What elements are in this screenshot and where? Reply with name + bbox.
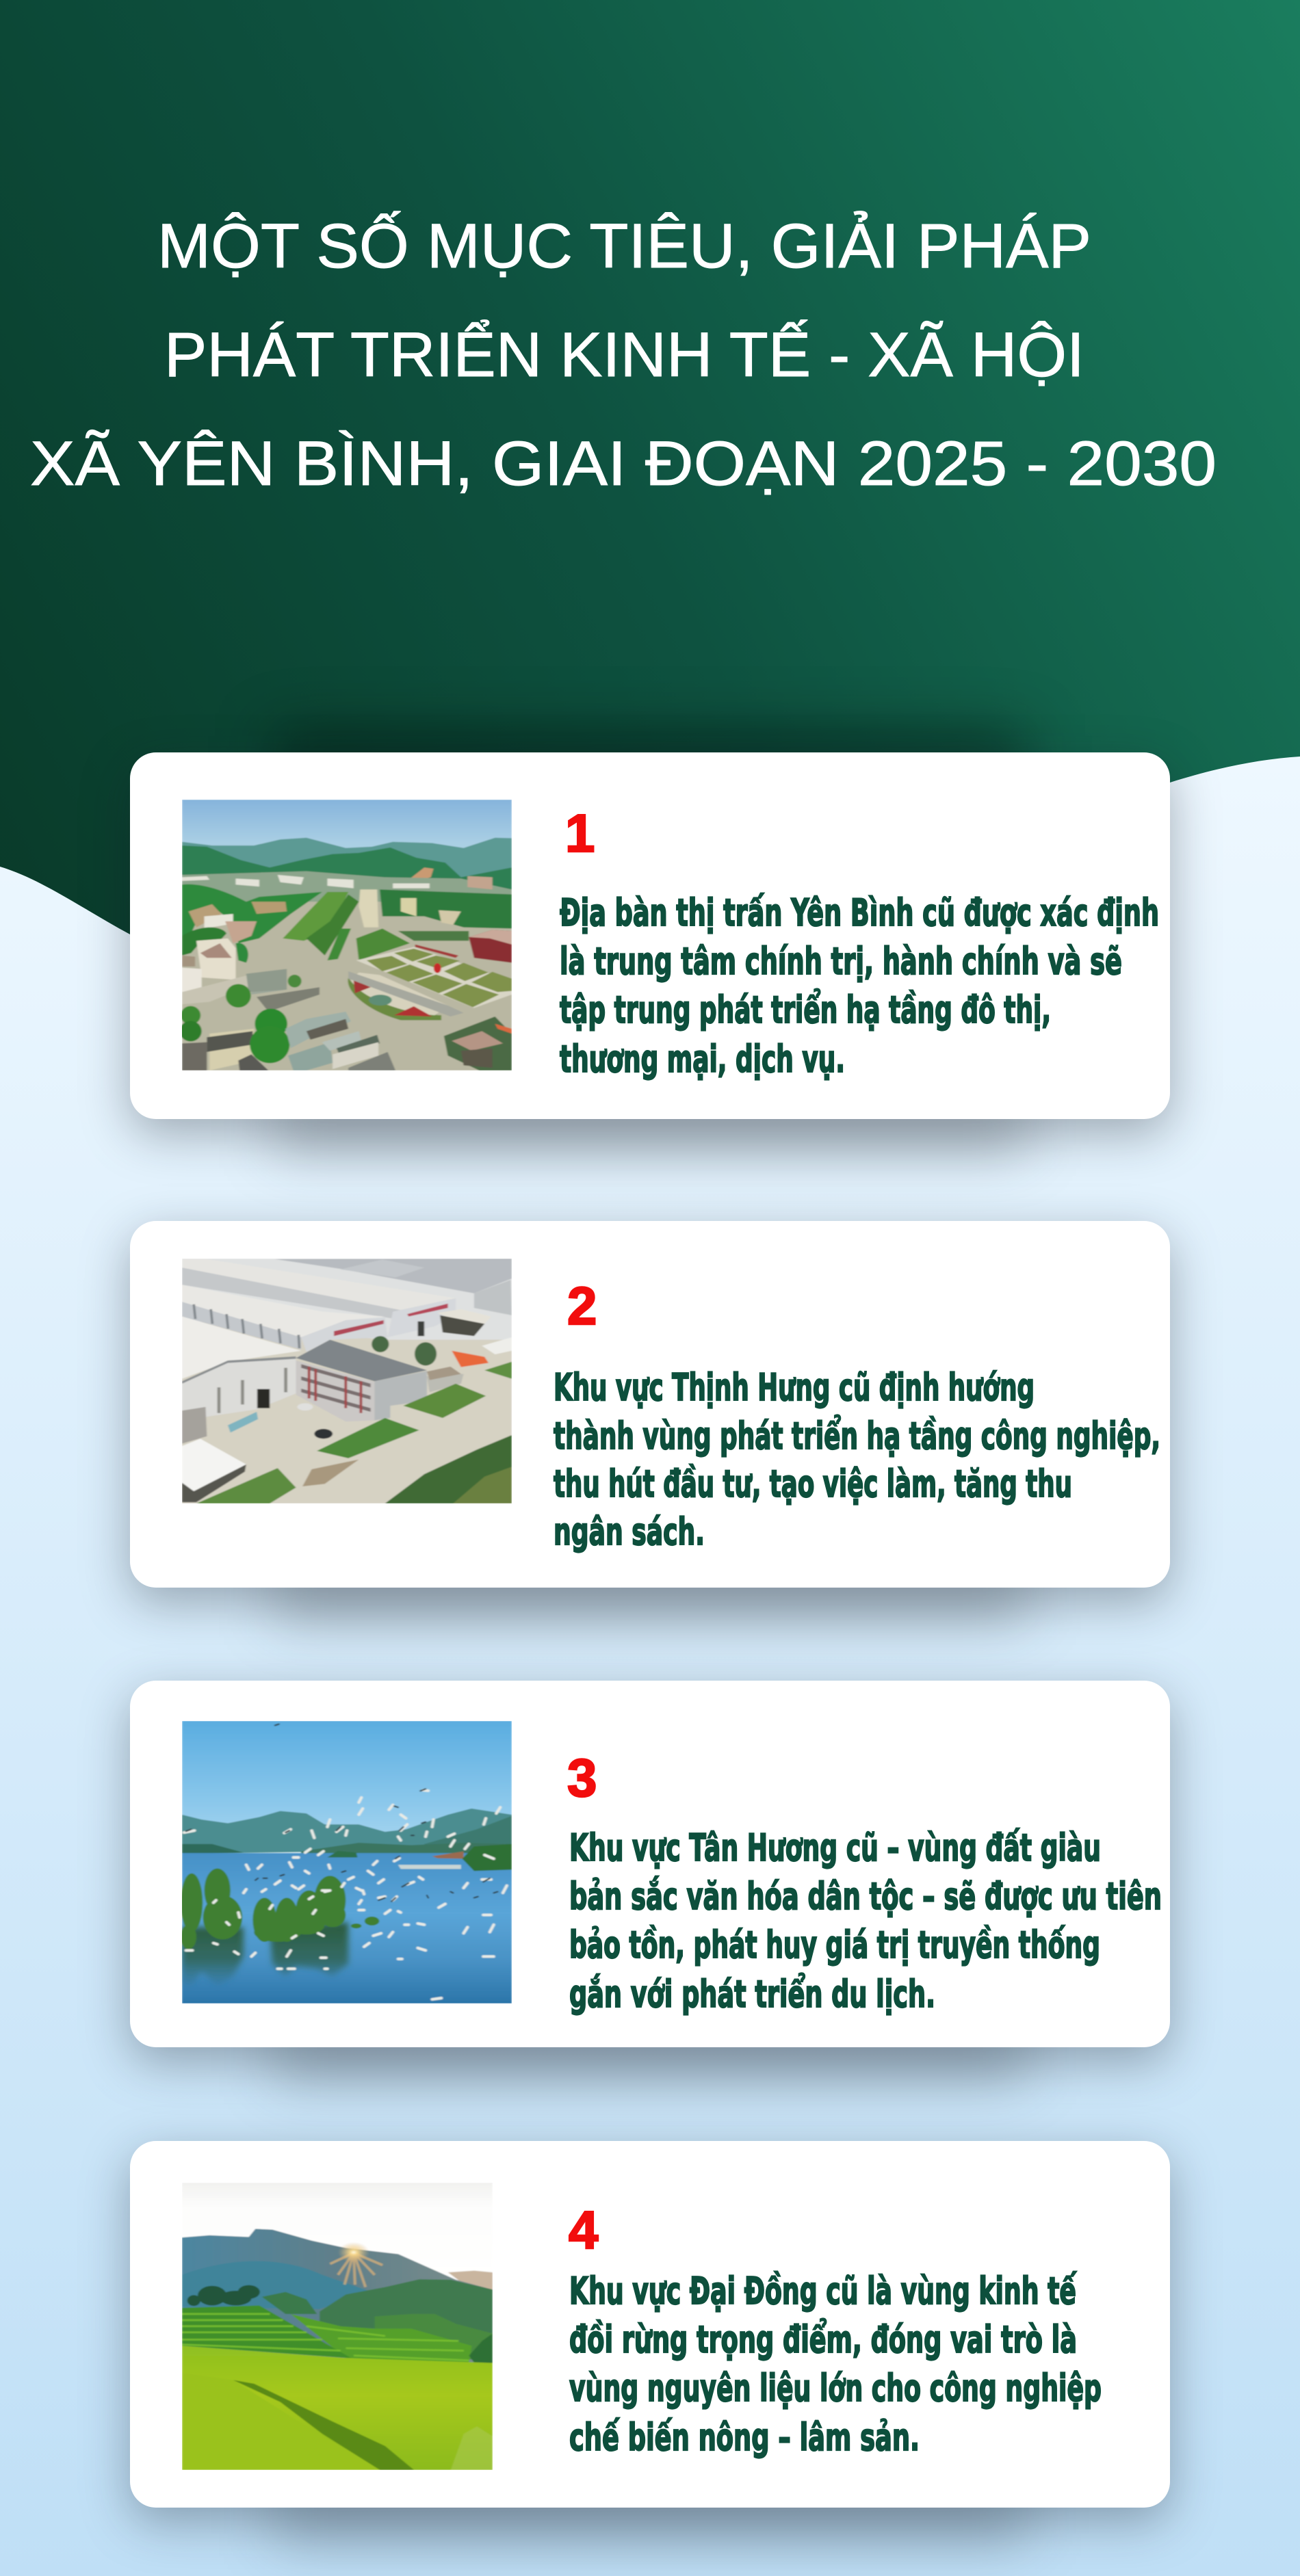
- shadow above first card: [274, 732, 1026, 780]
- panel: card 3: [130, 1681, 1170, 2047]
- title: XÃ YÊN BÌNH, GIAI ĐOẠN 2025 - 2030: [30, 429, 1217, 499]
- number 3: 3: [567, 1748, 597, 1808]
- title: [30, 210, 1217, 499]
- text block: card 3: [567, 1748, 1162, 2016]
- paragraph 4: chế biến nông – lâm sản.: [569, 2416, 920, 2459]
- paragraph 4: [569, 2270, 1102, 2459]
- paragraph 1: thương mại, dịch vụ.: [560, 1038, 845, 1081]
- shadow band under card 4: [274, 2490, 1026, 2538]
- photo: lake with flying birds: [182, 1721, 512, 2003]
- panel: card 4: [130, 2141, 1170, 2508]
- photo: terraced rice fields at sunrise: [182, 2183, 493, 2470]
- photo: industrial park factory: [182, 1259, 512, 1503]
- shadow band under card 2: [274, 1570, 1026, 1618]
- title: PHÁT TRIỂN KINH TẾ - XÃ HỘI: [164, 319, 1084, 390]
- paragraph 3: gắn với phát triển du lịch.: [569, 1973, 935, 2016]
- photo: aerial view of Yên Bình town: [182, 800, 512, 1070]
- paragraph 1: [560, 891, 1159, 1081]
- text block: card 1: [560, 803, 1159, 1081]
- paragraph 2: ngân sách.: [554, 1510, 705, 1553]
- paragraph 3: [569, 1826, 1162, 2016]
- title: MỘT SỐ MỤC TIÊU, GIẢI PHÁP: [157, 210, 1091, 281]
- number 1: 1: [565, 803, 595, 863]
- text block: card 2: [553, 1276, 1160, 1553]
- number 4: 4: [569, 2200, 598, 2260]
- shadow band under card 3: [274, 2029, 1026, 2077]
- shadow band under card 1: [274, 1101, 1026, 1149]
- text block: card 4: [568, 2200, 1102, 2459]
- panel: card 2: [130, 1221, 1170, 1588]
- panel: card 1: [130, 752, 1170, 1119]
- number 2: 2: [567, 1276, 597, 1336]
- paragraph 2: [554, 1366, 1160, 1553]
